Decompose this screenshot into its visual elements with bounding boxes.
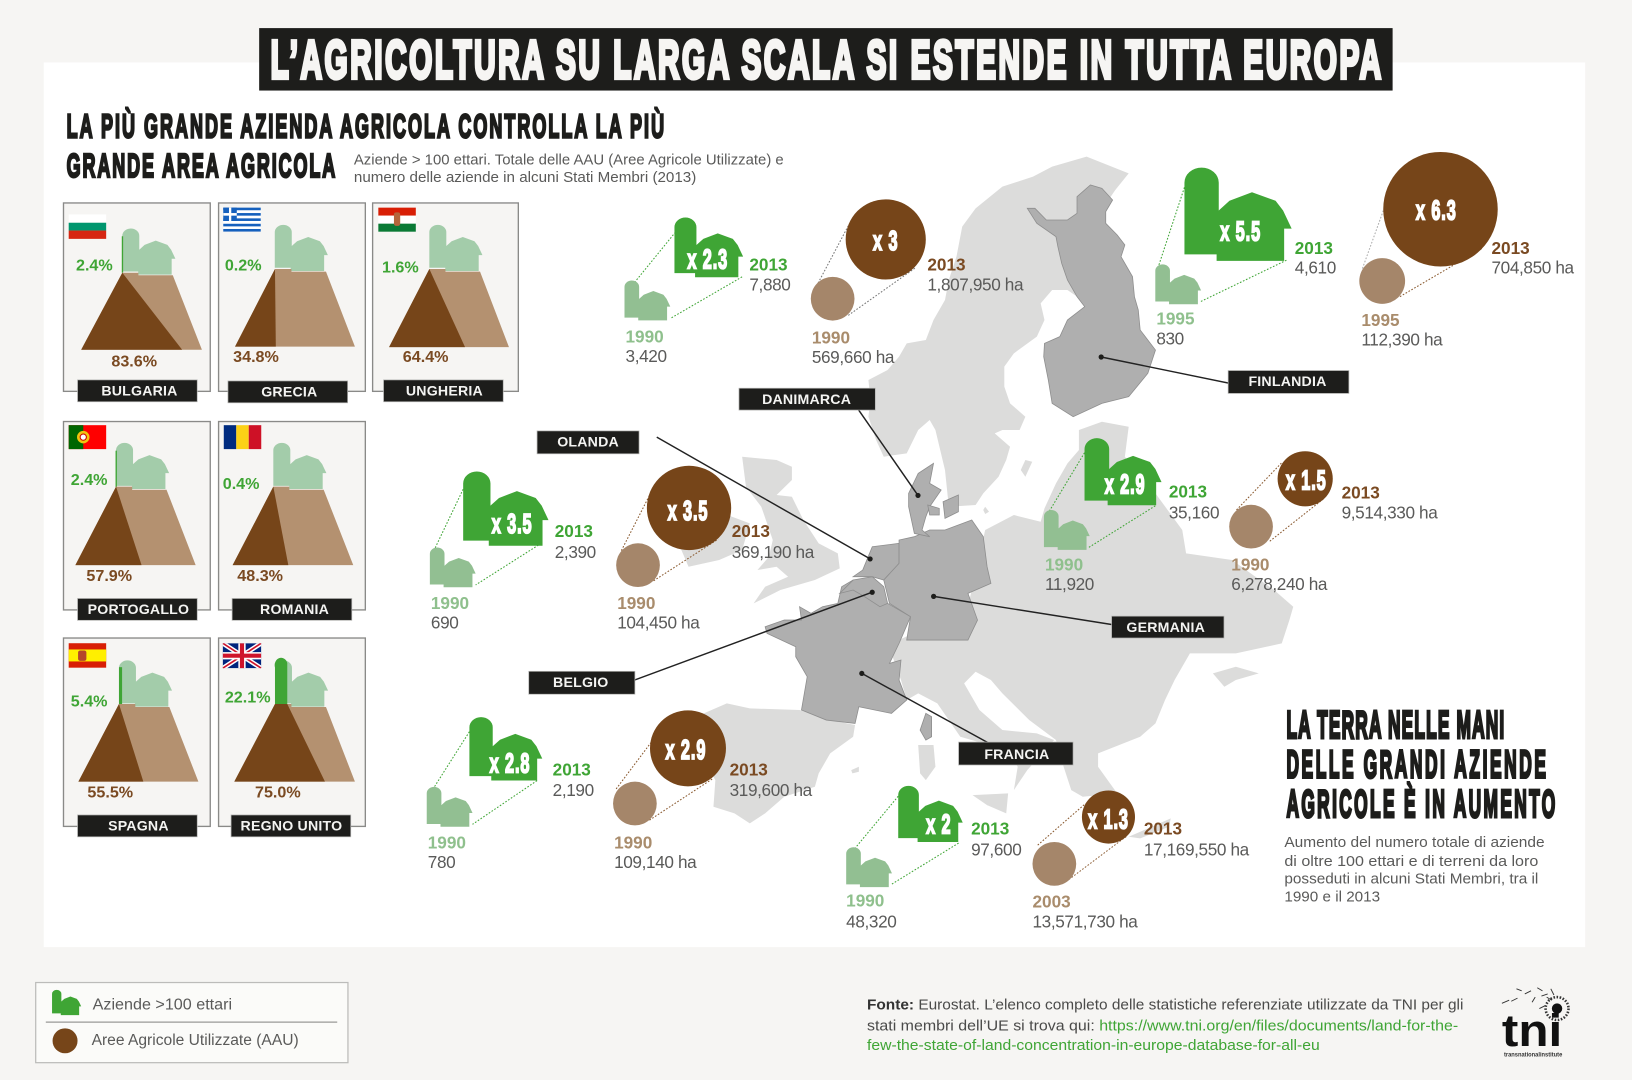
flag: Portugal [69,425,106,449]
source note: Fonte: Eurostat. L’elenco completo delle statistiche referenziate utilizzate da TNI per gli [867,997,1463,1014]
label: Grecia: GRECIA [261,384,317,400]
map: Sardinia [918,745,935,780]
land comparison: Belgio: 1990 [614,832,652,852]
legend icon: farm [52,990,81,1015]
label: Danimarca [739,388,875,410]
map: Spain and Portugal [685,703,855,823]
land comparison: Germania: x 1.5 [1286,464,1327,496]
heading: largest farms: LA PIÙ GRANDE AZIENDA AGRICOLA CONTROLLA LA PIÙ [67,106,664,145]
label: Romania [232,598,352,620]
description text: di oltre 100 ettari e di terreni da loro [1284,853,1538,870]
land comparison: Germania: 1990 [1231,554,1269,574]
land comparison: Olanda: 1990 [617,593,655,613]
map: Finland [1027,185,1155,417]
land comparison: Belgio [613,710,813,872]
panel: Spagna: 5.4% [71,693,108,711]
label: Portogallo: PORTOGALLO [88,601,189,617]
label: Germania [1112,616,1224,638]
heading: largest farms [67,106,664,184]
logo: tni [1502,988,1569,1058]
panel: Portogallo: 2.4% [71,471,108,489]
panel: Ungheria [373,203,518,402]
pointer: Danimarca [859,410,921,498]
land comparison: Francia: 2013 [1144,819,1182,839]
heading: land in large farms [1286,704,1555,826]
panel: Regno Unito: 22.1% [225,689,271,707]
map: Belgium [840,577,888,607]
land share mountain [389,269,509,347]
farms comparison: Olanda: 2,390 [555,542,596,562]
land comparison: Germania: 2013 [1342,483,1380,503]
land comparison: Olanda: 104,450 ha [617,613,700,633]
map: Great Britain [742,457,840,603]
land share mountain [81,273,202,350]
land comparison: Danimarca [811,199,1024,367]
map: Denmark Funen [928,505,939,515]
land comparison: Danimarca: x 3 [873,224,898,256]
farms comparison: Finlandia: 1995 [1156,309,1195,329]
land comparison: Francia: 13,571,730 ha [1032,911,1138,931]
label: Ungheria: UNGHERIA [406,383,483,399]
farm share icon [275,658,328,707]
farm share icon [273,443,326,489]
panel: Romania: 0.4% [223,475,260,493]
label: Spagna [78,815,197,837]
subheading note [354,151,784,186]
label: Danimarca: DANIMARCA [762,391,851,407]
land comparison: Francia: x 1.3 [1088,803,1129,835]
label: Bulgaria: BULGARIA [101,383,178,399]
land comparison: Germania: 9,514,330 ha [1342,502,1438,522]
panel: Bulgaria [63,203,210,402]
farms comparison: Germania: x 2.9 [1105,468,1146,499]
label: Regno Unito [231,815,351,837]
farms comparison: Germania: 11,920 [1045,574,1094,594]
farm share icon [429,225,482,271]
panel: Grecia: 34.8% [233,348,279,366]
land share mountain [234,704,355,782]
map of Europe [677,157,1293,838]
farms comparison: Olanda [430,471,596,633]
farms comparison: Danimarca: 3,420 [626,346,667,366]
land comparison: Finlandia [1359,152,1575,350]
heading: largest farms: GRANDE AREA AGRICOLA [67,147,335,184]
map: Corsica [920,713,932,740]
farms comparison: Belgio: 1990 [428,832,466,852]
farms comparison: Danimarca: 2013 [749,255,788,275]
farms comparison: Olanda: 2013 [555,521,593,541]
panel: Romania: 48.3% [237,567,283,585]
heading: land in large farms: LA TERRA NELLE MANI [1286,704,1504,747]
farms comparison: Germania: 35,160 [1169,502,1219,522]
label: Francia: FRANCIA [984,746,1049,762]
subheading note: Aziende > 100 ettari. Totale delle AAU (Aree Agricole Utilizzate) e [354,151,784,168]
panel: Bulgaria: 83.6% [111,352,157,370]
land comparison: Germania: 6,278,240 ha [1231,574,1328,594]
label: Grecia [228,381,348,403]
label: Portogallo [78,598,197,620]
panel: Spagna: 55.5% [87,783,133,801]
panel: Romania [219,422,365,620]
description text: Aumento del numero totale di aziende [1284,834,1545,851]
farms comparison: Germania: 1990 [1045,554,1083,574]
map: Scandinavia [868,157,1129,507]
land comparison: Finlandia: 1995 [1361,310,1400,330]
legend: Aree Agricole Utilizzate (AAU) [92,1031,299,1049]
farm share icon [275,225,328,271]
land comparison: Francia: 2003 [1032,892,1071,912]
farms comparison: Belgio: 780 [428,852,455,872]
farm share icon [119,660,172,707]
label: Bulgaria [78,380,197,402]
farms comparison: Danimarca [624,218,791,366]
panel: Grecia: 0.2% [225,257,262,275]
map: Germany [884,520,991,640]
land share mountain [235,269,355,347]
farms comparison: Belgio: 2,190 [553,780,594,800]
land comparison: Danimarca: 569,660 ha [812,347,895,367]
pointer: Finlandia [1099,354,1228,383]
land comparison: Finlandia: x 6.3 [1416,194,1457,226]
flag: Bulgaria [69,214,106,239]
farms comparison: Belgio [427,717,594,872]
label: Ungheria [384,380,503,402]
flag: Hungary [378,208,416,232]
label: Olanda: OLANDA [557,434,619,450]
label: Belgio [529,671,635,694]
farms comparison: Danimarca: x 2.3 [687,243,728,275]
farms comparison: Belgio: 2013 [553,759,591,779]
land share mountain [78,704,198,782]
land comparison: Danimarca: 2013 [927,255,966,275]
farms comparison: Francia: 48,320 [846,911,896,931]
farms comparison: Finlandia [1155,168,1336,349]
label: Belgio: BELGIO [553,674,609,690]
label: Finlandia: FINLANDIA [1248,373,1327,389]
land comparison: Olanda: 369,190 ha [732,542,815,562]
farms comparison: Francia: 2013 [971,819,1009,839]
farms comparison: Finlandia: 2013 [1295,238,1333,258]
label: Olanda [537,431,639,454]
farm share icon [122,228,175,275]
logo: tni: transnationalinstitute [1504,1051,1563,1058]
panel: Ungheria: 64.4% [403,348,449,366]
land comparison: Francia [1032,790,1250,931]
panel: Regno Unito [219,638,365,837]
land comparison: Germania [1229,451,1438,594]
title banner: L’AGRICOLTURA SU LARGA SCALA SI ESTENDE IN TUTTA EUROPA [271,30,1381,90]
pointer: Olanda [657,437,873,562]
farms comparison: Finlandia: 830 [1156,329,1184,349]
description text [1284,834,1545,905]
land comparison: Francia: 17,169,550 ha [1144,840,1250,860]
heading: land in large farms: DELLE GRANDI AZIENDE [1286,744,1546,787]
map: Crete [1129,818,1171,838]
pointer: Francia [859,671,989,743]
label: Finlandia [1228,371,1349,393]
farms comparison: Francia: 1990 [846,891,884,911]
panel: Spagna [63,638,210,837]
map: Denmark Zealand [943,495,958,518]
farms comparison: Francia [846,786,1021,931]
map: Bornholm and Aland [983,507,989,514]
map: Crimea [1213,667,1259,687]
farms comparison: Germania [1044,438,1219,594]
map: Gotland [1021,460,1032,477]
land comparison: Olanda [616,466,815,633]
land comparison: Olanda: 2013 [732,521,770,541]
land share mountain [233,487,353,565]
legend [36,983,348,1063]
land comparison: Finlandia: 112,390 ha [1361,330,1443,350]
map: Balearic islands [851,767,859,773]
panel: Portogallo [63,422,210,620]
source note: few-the-state-of-land-concentration-in-europe-database-for-all-eu [867,1037,1320,1054]
label: Romania: ROMANIA [260,601,329,617]
logo: tni: tni [1502,1005,1562,1056]
land comparison: Belgio: x 2.9 [666,733,706,765]
farms comparison: Danimarca: 1990 [626,326,664,346]
subheading note: numero delle aziende in alcuni Stati Membri (2013) [354,169,696,186]
land comparison: Finlandia: 2013 [1491,238,1530,258]
flag: Greece [223,208,261,232]
farm share icon [116,443,169,489]
white content panel [44,62,1585,947]
map: Netherlands [853,543,899,580]
panel: Bulgaria: 2.4% [76,257,113,275]
panel: Portogallo: 57.9% [86,567,132,585]
farms comparison: Olanda: x 3.5 [492,507,532,539]
description text: posseduti in alcuni Stati Membri, tra il [1284,871,1538,888]
legend icon: land [53,1028,78,1053]
land comparison: Belgio: 109,140 ha [614,852,697,872]
map: France [765,580,911,723]
map: eastern and central Europe with Italy [891,422,1293,797]
pointer: Germania [931,594,1112,624]
heading: land in large farms: AGRICOLE È IN AUMENTO [1286,782,1555,826]
land comparison: Belgio: 319,600 ha [730,780,813,800]
farms comparison: Finlandia: x 5.5 [1220,215,1261,247]
land share mountain [75,487,196,565]
farms comparison: Francia: x 2 [926,808,952,840]
flag: Spain [69,643,106,668]
label: Regno Unito: REGNO UNITO [241,818,342,834]
land comparison: Danimarca: 1,807,950 ha [927,274,1024,294]
land comparison: Danimarca: 1990 [812,327,850,347]
map: Ireland [677,513,750,567]
farms comparison: Olanda: 690 [431,613,458,633]
source note [867,997,1463,1054]
label: Francia [959,742,1073,765]
farms comparison: Germania: 2013 [1169,482,1207,502]
flag: Romania [224,425,261,449]
map: Sicily [973,793,1008,813]
panel: Grecia [219,203,365,403]
land comparison: Olanda: x 3.5 [668,494,708,526]
land comparison: Finlandia: 704,850 ha [1491,258,1575,278]
farms comparison: Finlandia: 4,610 [1295,258,1336,278]
label: Spagna: SPAGNA [108,818,169,834]
description text: 1990 e il 2013 [1284,888,1380,905]
farms comparison: Olanda: 1990 [431,593,469,613]
panel: Ungheria: 1.6% [382,259,419,277]
label: Germania: GERMANIA [1126,619,1205,635]
land comparison: Belgio: 2013 [730,759,768,779]
legend: Aziende >100 ettari [93,996,232,1014]
pointer: Belgio [633,590,875,681]
farms comparison: Francia: 97,600 [971,840,1021,860]
panel: Regno Unito: 75.0% [255,783,301,801]
flag: United Kingdom [222,643,262,668]
map: Denmark Jutland [909,463,941,537]
source note: stati membri dell’UE si trova qui: https://www.tni.org/en/files/documents/land-for-the- [867,1017,1458,1034]
farms comparison: Danimarca: 7,880 [749,274,791,294]
farms comparison: Belgio: x 2.8 [490,747,530,778]
